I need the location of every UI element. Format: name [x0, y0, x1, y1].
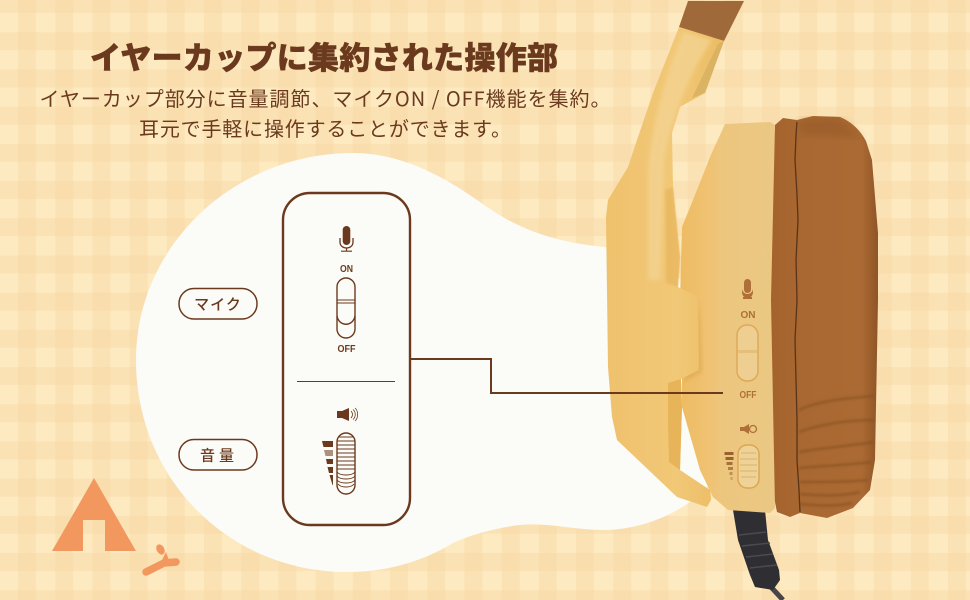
- connector line: [411, 359, 723, 393]
- label: 音量: [179, 440, 257, 470]
- headphones photo: [606, 1, 878, 600]
- icon: speaker: [337, 408, 358, 421]
- headband: [679, 1, 744, 41]
- icon: cup microphone print: [742, 279, 753, 299]
- title: イヤーカップに集約された操作部: [90, 33, 558, 78]
- description text: イヤーカップ部分に音量調節、マイクON / OFF機能を集約。: [40, 83, 610, 112]
- description text: [40, 83, 610, 142]
- tent icon: [52, 478, 136, 551]
- mic ON label: ON: [340, 264, 353, 275]
- label: 音量: 音量: [200, 444, 238, 466]
- cup volume ticks: [724, 452, 734, 480]
- mic switch: [337, 278, 355, 338]
- white blob panel: [136, 153, 720, 572]
- control panel card: [283, 193, 410, 525]
- cable: [733, 510, 783, 600]
- cup volume wheel: [738, 445, 759, 488]
- icon: microphone: [340, 226, 353, 251]
- cup ON label: ON: [740, 310, 756, 321]
- twig icon: [146, 543, 176, 572]
- cup mic switch: [737, 325, 758, 381]
- ear cushion: [770, 116, 878, 518]
- cup OFF label: OFF: [740, 390, 756, 401]
- ear cup housing: [680, 122, 775, 513]
- volume wheel: [337, 433, 355, 494]
- label: マイク: [179, 288, 257, 319]
- volume level wedge: [322, 441, 333, 485]
- headphone arm: [606, 27, 724, 507]
- icon: cup speaker print: [740, 424, 756, 434]
- description text: 耳元で手軽に操作することができます。: [139, 113, 511, 142]
- label: マイク: マイク: [194, 294, 242, 314]
- mic OFF label: OFF: [338, 344, 356, 355]
